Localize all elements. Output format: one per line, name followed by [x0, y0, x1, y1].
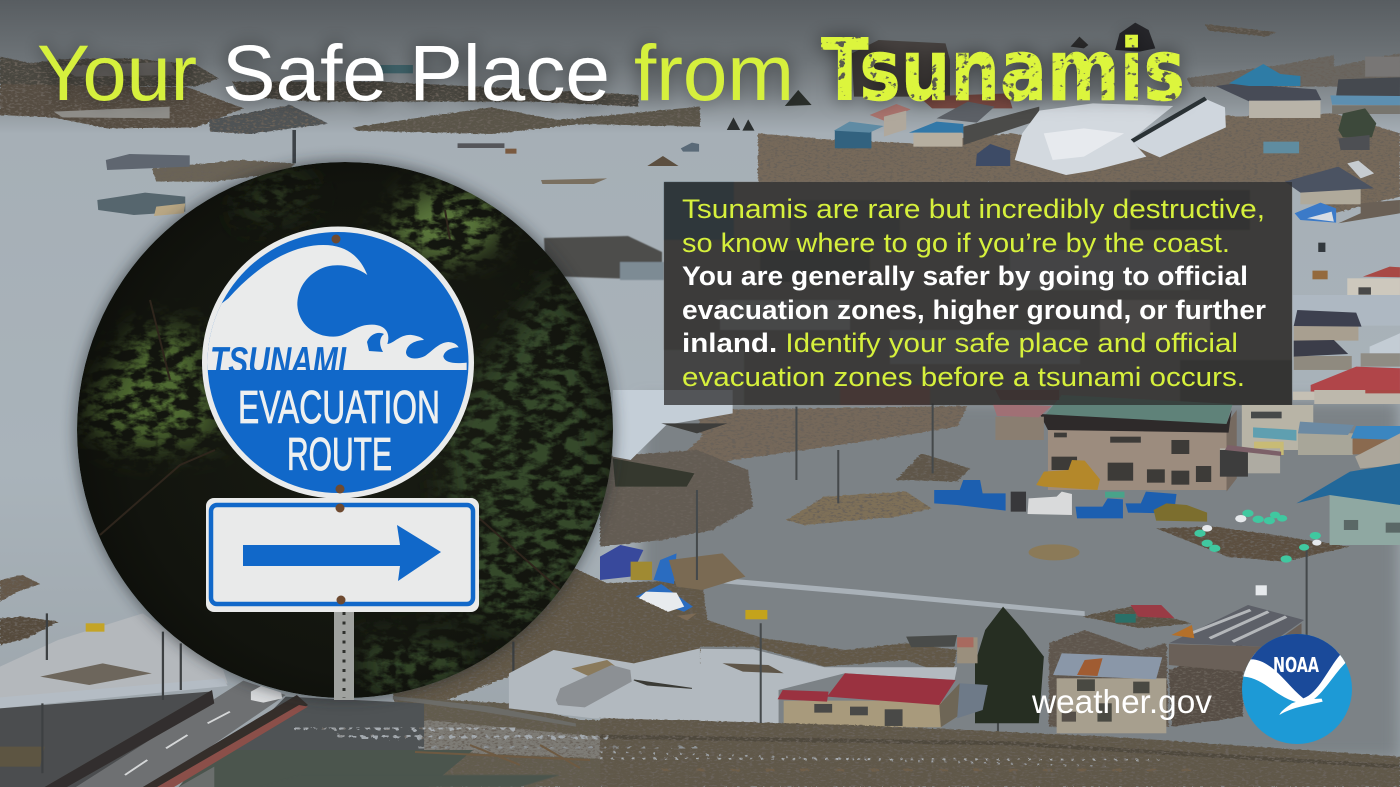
tree: [975, 607, 1044, 723]
white tents: [1015, 103, 1173, 175]
blue roofed house: [1216, 83, 1321, 101]
sign rivets: [332, 234, 346, 604]
lower left shore, bridge and embankment: [0, 567, 700, 787]
guard rail: [0, 678, 228, 708]
forest backdrop: [77, 162, 615, 700]
line 5: inland. Identify your safe place and official: [682, 328, 1238, 358]
left machinery edge and road: [393, 696, 576, 727]
pale flooded shore: [0, 613, 228, 700]
teal roofed building: [1330, 495, 1400, 545]
construction vehicles and trucks: [1036, 460, 1100, 490]
round tsunami sign: [200, 226, 474, 498]
text panel: [664, 182, 1292, 405]
river bottom edge: [260, 775, 560, 787]
photo circle: tsunami evacuation route sign: [75, 160, 615, 700]
bridge railings: [45, 690, 214, 787]
wrapped bales: [1194, 510, 1321, 563]
title word: Your: Your: [37, 28, 197, 117]
road: [76, 681, 286, 787]
darker flood water, central and right: [640, 400, 1400, 760]
wrecked red-roof shed: [1131, 605, 1174, 618]
tunnel greenhouse on the left: [600, 665, 633, 702]
left side trees and machinery: [613, 458, 694, 487]
sign lettering: TSUNAMI: TSUNAMI: [210, 340, 347, 383]
dark slope and embankment: [0, 692, 210, 787]
left house cluster: [835, 130, 871, 148]
line 2: so know where to go if you’re by the coast.: [682, 228, 1230, 258]
logs: [415, 745, 590, 768]
dark trees in the water: [1115, 23, 1155, 52]
small pink-roof house: [995, 417, 1044, 440]
collapsed tent: [613, 390, 733, 460]
line 6: evacuation zones before a tsunami occurs.: [682, 362, 1245, 392]
snow patches on embankment: [295, 728, 700, 748]
upper left shoreline and floating wreckage: [0, 57, 700, 216]
icon: NOAA logo: [1242, 634, 1352, 744]
red roofed house: [784, 701, 942, 727]
pond over lower field: [600, 648, 957, 723]
far right houses: [1365, 57, 1400, 77]
upper right debris field, tents and houses: [727, 23, 1400, 213]
arrow sign panel: [206, 498, 479, 612]
flood barrier: [715, 577, 1085, 616]
title words: Safe Place: Safe Place: [222, 28, 610, 117]
wave graphic: [200, 245, 467, 370]
right side house cluster: [1285, 167, 1400, 400]
grey hip-roof house and blue tarp: [1300, 188, 1361, 204]
arrow: [243, 525, 441, 581]
right-of-circle sunken building: [544, 236, 664, 280]
poles: [697, 403, 1307, 733]
title: [37, 21, 1185, 121]
hall with striped roof: [1169, 623, 1302, 672]
NOAA wordmark: NOAA: [1273, 653, 1319, 677]
parked car: [251, 686, 282, 703]
house behind title: [852, 40, 950, 97]
sign post: [334, 606, 354, 700]
main tan building: [1048, 423, 1228, 490]
small shed: [957, 637, 978, 663]
line 1: Tsunamis are rare but incredibly destructive,: [682, 194, 1265, 224]
foreground debris embankment: [600, 718, 1400, 787]
sign lettering: EVACUATION: EVACUATION: [238, 381, 440, 433]
right pond and greenhouse: [509, 648, 700, 720]
town beneath the translucent text panel: [664, 182, 1292, 405]
title word: Tsunamis: Tsunamis: [821, 21, 1185, 121]
floating log pile: [1029, 544, 1080, 560]
poles: [42, 613, 513, 773]
rusted roof house: [1057, 678, 1166, 733]
line 4: evacuation zones, higher ground, or further: [682, 295, 1267, 325]
line 3: You are generally safer by going to official: [682, 261, 1248, 291]
sign lettering: ROUTE: ROUTE: [287, 428, 392, 480]
central flooded district: [600, 390, 1400, 733]
houses right of main building: [1242, 405, 1313, 450]
title word: from: from: [634, 28, 794, 117]
website label: weather.gov: [1031, 683, 1212, 720]
